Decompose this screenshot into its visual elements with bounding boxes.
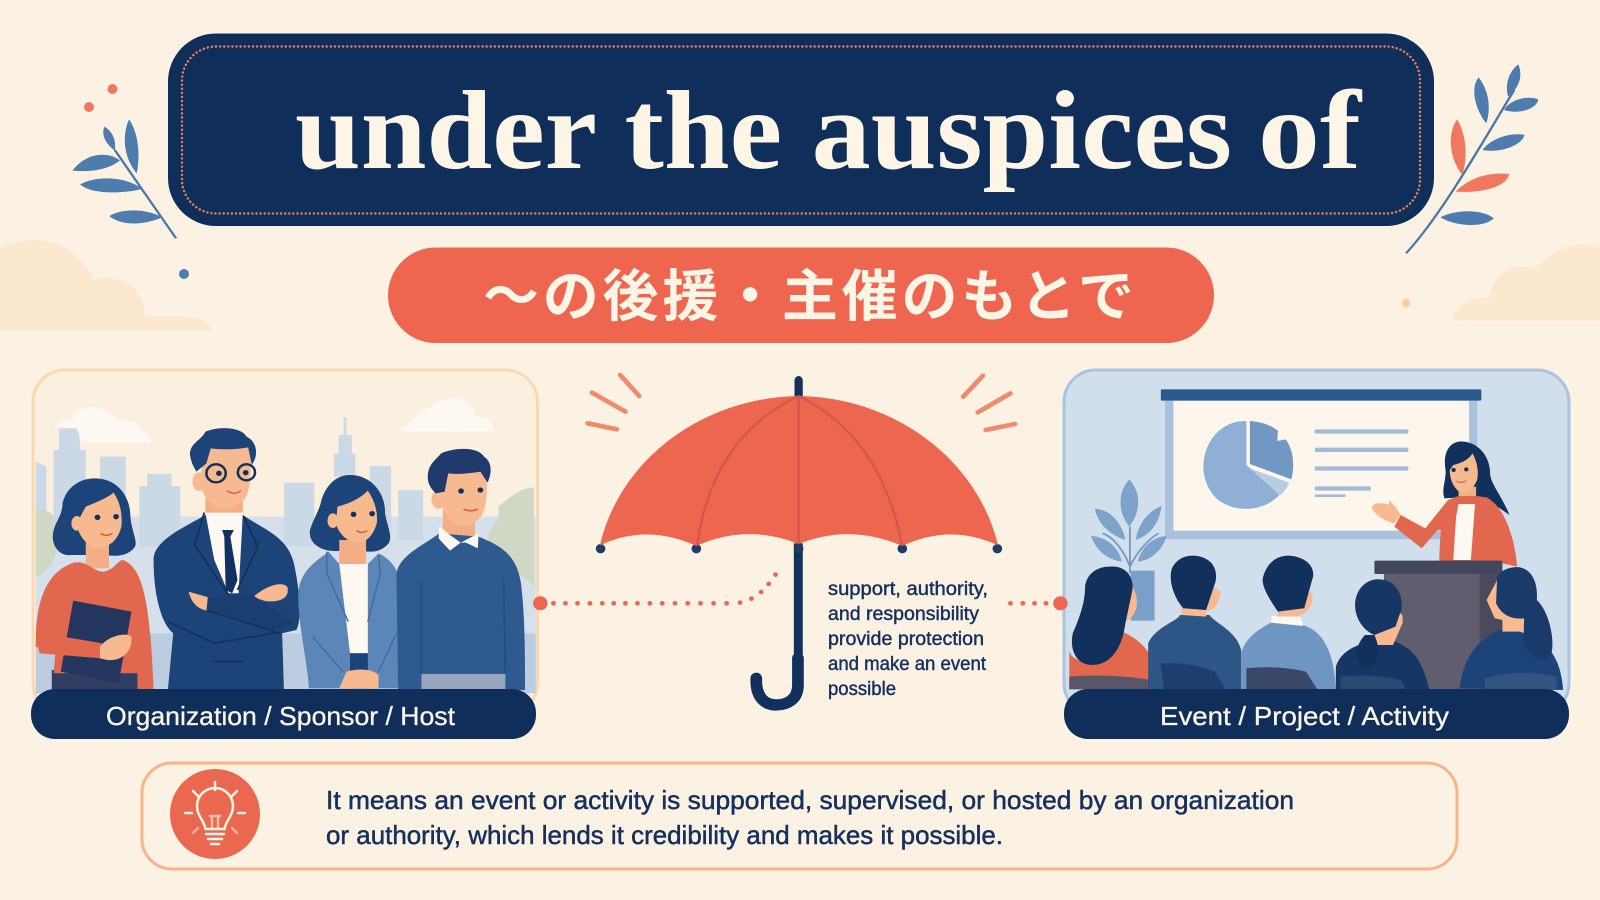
- umbrella tips: [596, 544, 1002, 553]
- umbrella canopy: [600, 396, 998, 546]
- callout text: or authority, which lends it credibility and makes it possible.: [326, 820, 1003, 850]
- audience member 1: [1069, 566, 1148, 690]
- canopy ribs: [697, 396, 902, 545]
- cloud: right decoration: [1452, 244, 1600, 321]
- umbrella ferrule and shaft: [794, 376, 803, 660]
- umbrella caption: possible: [828, 678, 896, 700]
- audience member 5: [1460, 567, 1563, 690]
- subtitle text: 〜の後援・主催のもとで: [483, 265, 1134, 328]
- audience member 2: [1148, 556, 1241, 690]
- panel background: [33, 370, 538, 715]
- figures: four people: [36, 428, 525, 690]
- umbrella caption: provide protection: [828, 628, 984, 650]
- umbrella: [533, 375, 1068, 705]
- dotted connector right: [1008, 596, 1068, 610]
- audience: [1069, 556, 1563, 690]
- cloud: bottom left decoration: [0, 240, 212, 331]
- umbrella caption: support, authority,: [828, 578, 988, 600]
- person: woman in coral: [36, 478, 154, 690]
- panel: organization: [31, 370, 538, 739]
- podium: [1374, 561, 1502, 691]
- decorative dots left: [84, 84, 189, 279]
- label bar: event: Event / Project / Activity: [1160, 701, 1449, 731]
- icon: light bulb: [170, 769, 260, 859]
- label bar: organization: Organization / Sponsor / Host: [106, 701, 456, 731]
- subtitle pill: [388, 248, 1214, 343]
- right leaf branch: [1406, 64, 1538, 253]
- plant: [1091, 479, 1167, 621]
- projection screen: [1161, 389, 1481, 539]
- callout text: [326, 785, 1294, 850]
- umbrella caption: [828, 578, 988, 700]
- panel: event: [1064, 370, 1569, 739]
- person: woman in blue blazer: [298, 475, 406, 688]
- left leaf branch: [72, 119, 176, 238]
- umbrella caption: and make an event: [828, 653, 987, 675]
- umbrella caption: and responsibility: [828, 603, 979, 625]
- city skyline: [36, 397, 536, 693]
- umbrella handle: [756, 658, 798, 705]
- dotted connector left: [533, 572, 778, 610]
- person: man in navy suit: [154, 428, 300, 690]
- decorative dot right: [1402, 298, 1410, 308]
- title text: under the auspices: [295, 69, 1232, 193]
- callout: meaning: [142, 763, 1457, 869]
- title text: of: [1258, 69, 1363, 193]
- audience member 4: [1336, 579, 1429, 690]
- audience member 3: [1241, 556, 1336, 690]
- pie chart: [1203, 421, 1293, 509]
- label bar: organization: [31, 689, 536, 739]
- callout text: It means an event or activity is supported, supervised, or hosted by an organization: [326, 785, 1294, 815]
- presenter: [1372, 442, 1517, 567]
- panel background: [1064, 370, 1569, 715]
- emphasis rays: [588, 375, 1015, 430]
- slide text lines: [1315, 429, 1408, 497]
- label bar: event: [1064, 689, 1569, 739]
- person: man in blue sweater: [396, 449, 525, 690]
- title banner: [168, 34, 1434, 226]
